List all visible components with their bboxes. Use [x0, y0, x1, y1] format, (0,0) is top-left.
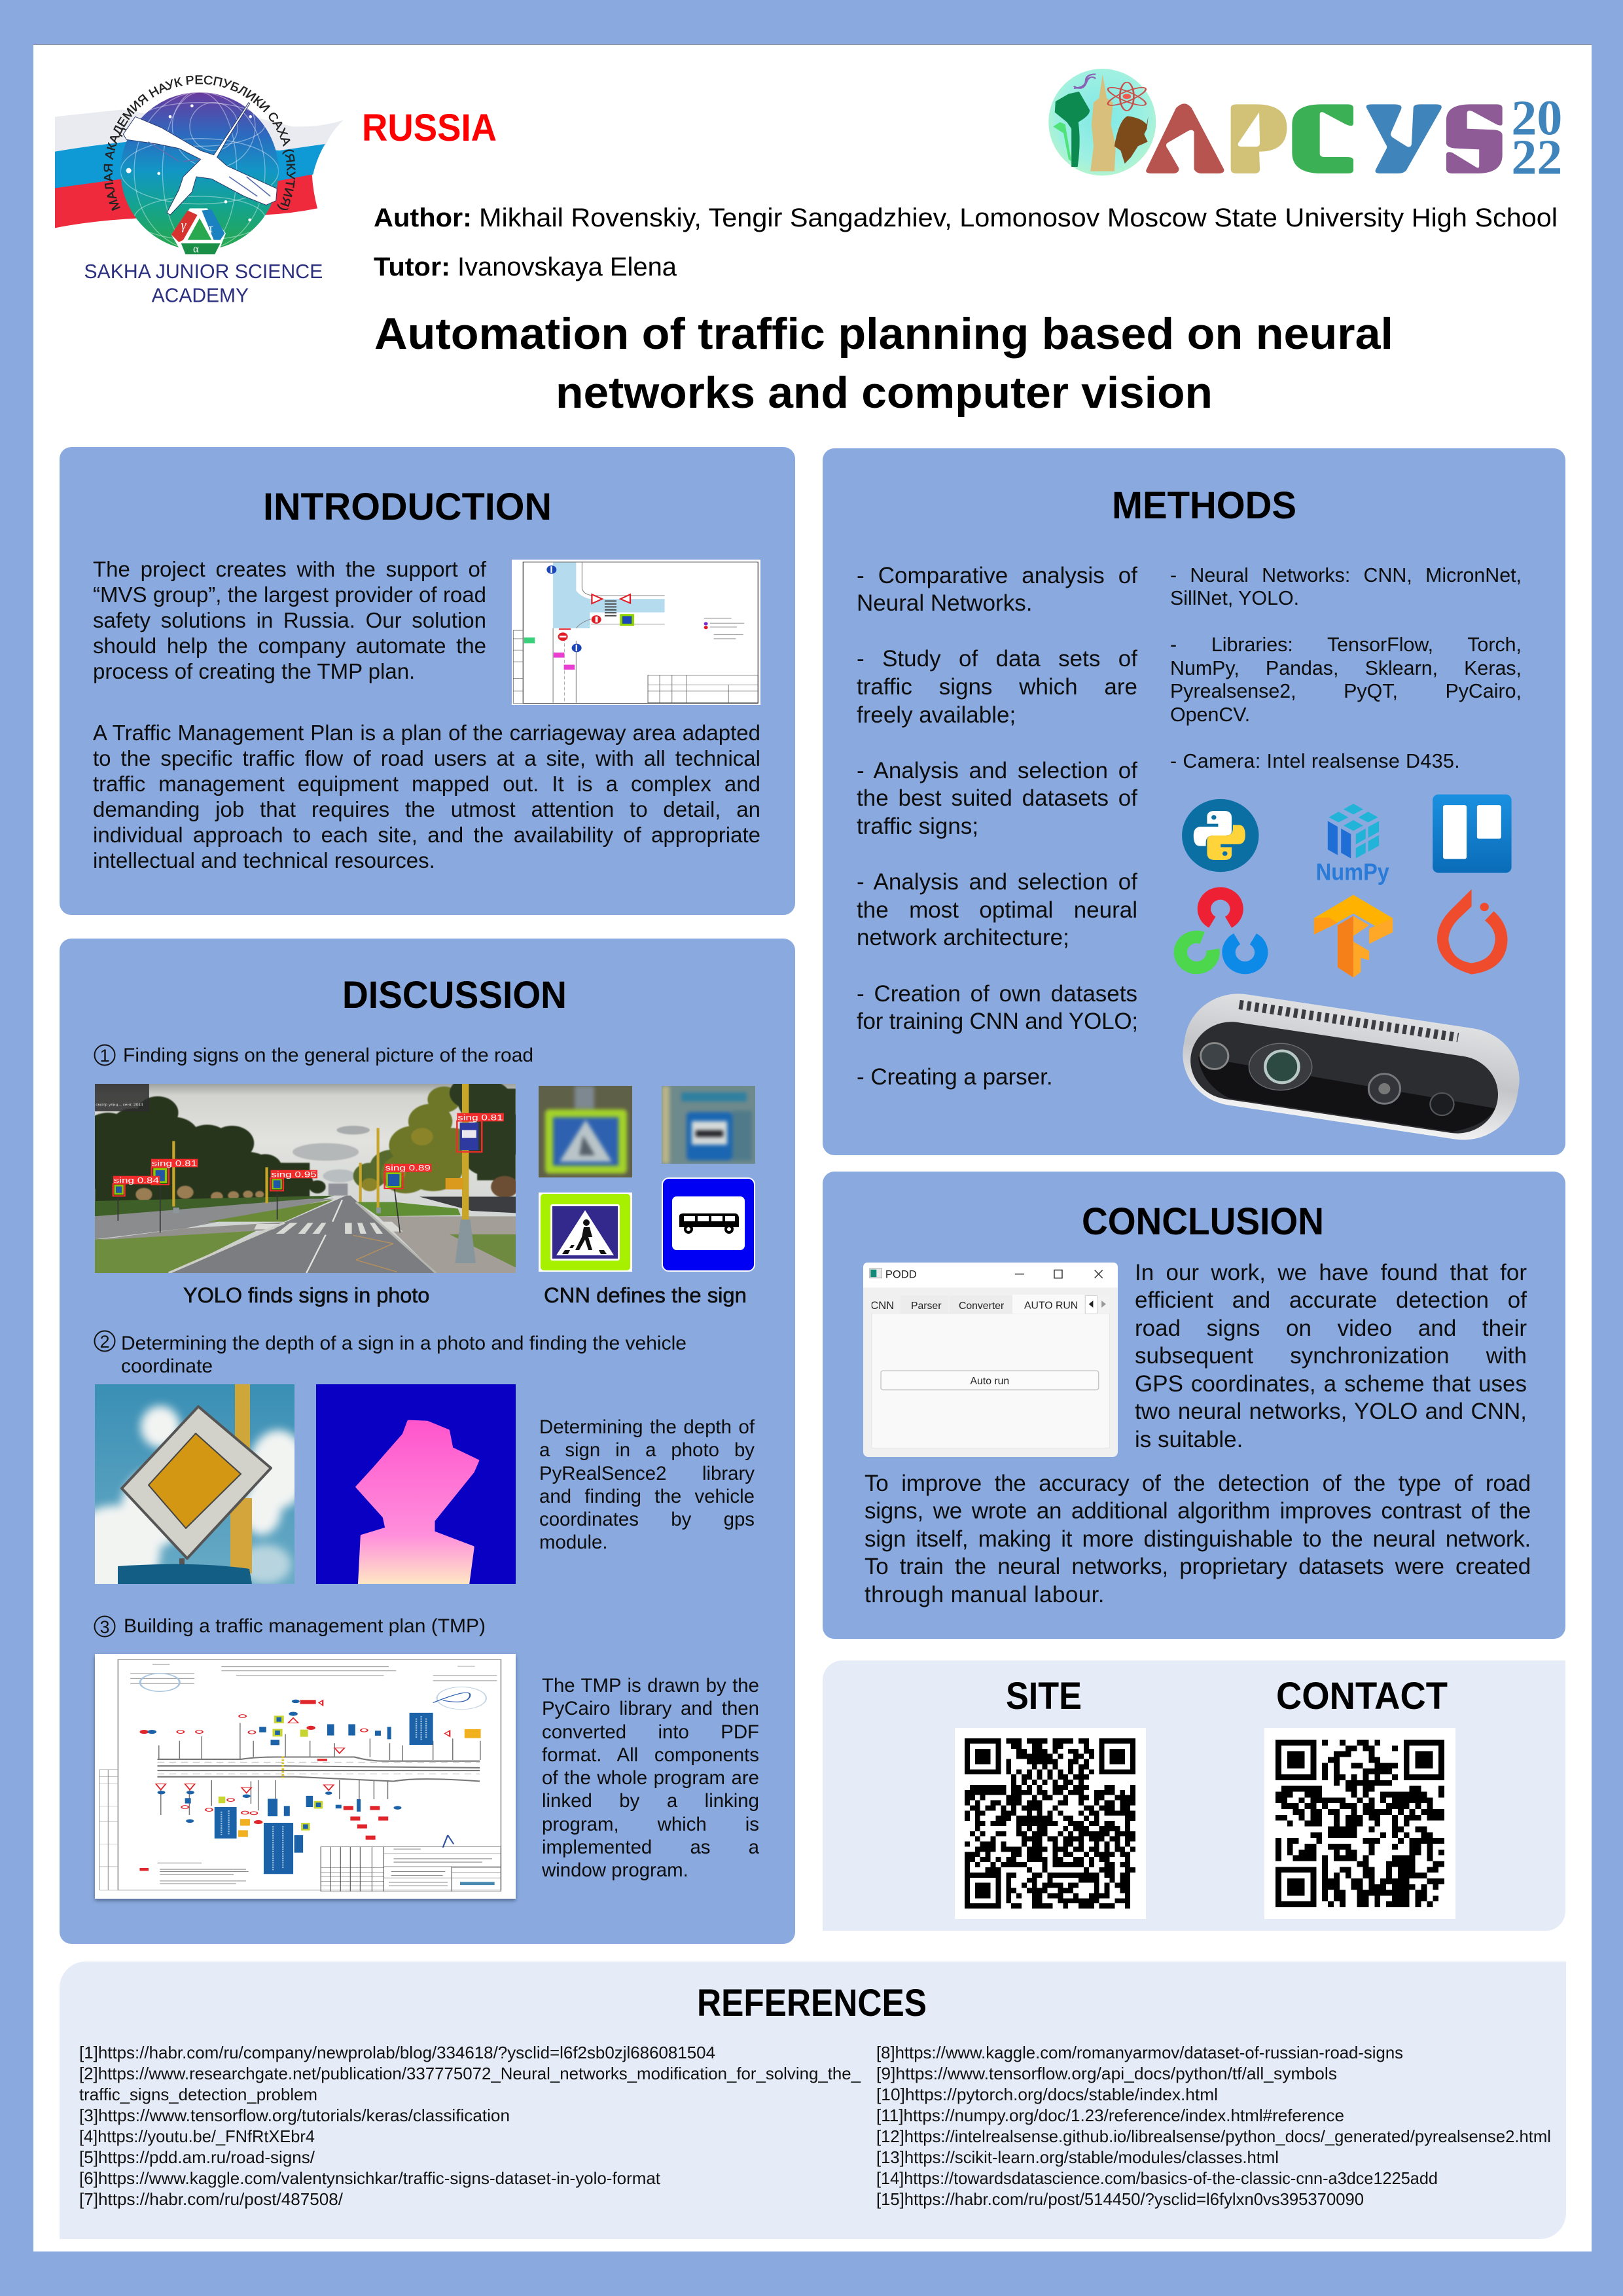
text: tools and libraries: - Neural Networks: CNN, MicronNet, — [1170, 564, 1522, 586]
reference list: right column: [15]https://habr.com/ru/post/514450/?ysclid=l6fylxn0vs395370090 — [876, 2189, 1364, 2209]
tutor line: Tutor: — [374, 253, 450, 281]
text: method steps: traffic signs which are — [857, 674, 1137, 700]
text: tools and libraries: - Libraries: TensorFlow, Torch, — [1170, 634, 1522, 656]
image: PODD application window — [863, 1263, 1118, 1457]
text: method steps: - Comparative analysis of — [857, 563, 1137, 588]
reference list: right column: [13]https://scikit-learn.org/stable/modules/classes.html — [876, 2147, 1279, 2167]
text: definition of TMP: traffic management equipment mapped out. It is a complex and — [93, 772, 760, 796]
text: depth explanation: a sign in a photo by — [539, 1439, 755, 1461]
reference list: right column — [876, 2040, 1557, 2217]
text: definition of TMP: intellectual and technical resources. — [93, 848, 435, 872]
text: method steps: - Creating a parser. — [857, 1064, 1053, 1090]
reference list: right column: [10]https://pytorch.org/docs/stable/index.html — [876, 2085, 1218, 2104]
marker: step 1 — [94, 1045, 115, 1066]
logo: Sakha Junior Science Academy: ACADEMY — [152, 285, 249, 307]
icon: PyTorch — [1437, 889, 1508, 974]
text: method steps: network architecture; — [857, 925, 1069, 950]
reference list: left column: [1]https://habr.com/ru/company/newprolab/blog/334618/?ysclid=l6f2sb0zjl686081504 — [79, 2043, 715, 2062]
panel: introduction — [60, 447, 795, 915]
text: findings — [1135, 1259, 1527, 1454]
text: definition of TMP: individual approach to each site, and the availability of appropriate — [93, 823, 760, 847]
text: TMP explanation: implemented as a — [542, 1837, 759, 1858]
text: TMP explanation: The TMP is drawn by the — [542, 1675, 759, 1696]
image: depth map — [316, 1384, 516, 1584]
marker: step 2 — [94, 1330, 115, 1352]
text: TMP explanation: program, which is — [542, 1814, 759, 1835]
image: PODD application window: Converter — [959, 1300, 1005, 1312]
title — [374, 309, 1393, 418]
reference list: right column: [14]https://towardsdatascience.com/basics-of-the-classic-cnn-a3dce1225add — [876, 2168, 1438, 2188]
text: depth explanation: and finding the vehicle — [539, 1486, 755, 1507]
step 3 heading: Building a traffic management plan (TMP) — [124, 1615, 486, 1637]
reference list: left column: [7]https://habr.com/ru/post/487508/ — [79, 2189, 344, 2209]
reference list: left column: [4]https://youtu.be/_FNfRtXEbr4 — [79, 2126, 315, 2146]
text: definition of TMP: to the specific traffic flow of road users at a site, with all technical — [93, 746, 760, 770]
icon: NumPy — [1316, 804, 1389, 885]
reference list: right column: [9]https://www.tensorflow.org/api_docs/python/tf/all_symbols — [876, 2064, 1337, 2083]
image: cropped crosswalk sign — [539, 1086, 632, 1177]
photo: YOLO detection on road: sing 0.84 — [114, 1176, 160, 1185]
panel: site and contact — [823, 1660, 1565, 1931]
logo: Sakha Junior Science Academy: SAKHA JUNIOR SCIENCE — [84, 260, 323, 283]
icon: NumPy: NumPy — [1316, 859, 1389, 885]
text: project summary — [93, 557, 487, 683]
image: reference bus stop sign — [662, 1177, 755, 1272]
text: method steps: for training CNN and YOLO; — [857, 1009, 1138, 1034]
text: method steps: the best suited datasets of — [857, 785, 1137, 811]
text: project summary: safety solutions in Russia. Our solution — [93, 608, 486, 632]
text: TMP explanation: PyCairo library and then — [542, 1698, 759, 1719]
text: findings: road signs on video and their — [1135, 1316, 1527, 1341]
reference list: left column: [3]https://www.tensorflow.org/tutorials/keras/classification — [79, 2106, 510, 2125]
text: tools and libraries: - Camera: Intel realsense D435. — [1170, 750, 1460, 772]
text: findings: In our work, we have found that for — [1135, 1260, 1527, 1285]
text: project summary: The project creates with the support of — [93, 557, 486, 581]
text: project summary: “MVS group”, the largest provider of road — [93, 583, 486, 607]
step 2 heading: coordinate — [121, 1355, 213, 1377]
text: algorithm and datasets: sign itself, making it more distinguishable to the neural network. — [865, 1526, 1531, 1552]
logo: Sakha Junior Science Academy: α — [193, 242, 199, 255]
QR code: contact — [1264, 1728, 1455, 1919]
text: method steps — [857, 563, 1138, 1090]
photo: YOLO detection on road: sing 0.81 — [457, 1113, 503, 1122]
text: findings: GPS coordinates, a scheme that uses — [1135, 1371, 1527, 1397]
text: depth explanation — [539, 1416, 755, 1553]
image: cropped bus stop sign — [662, 1086, 755, 1164]
author line: Author: — [374, 204, 472, 232]
icon: TensorFlow — [1314, 895, 1393, 977]
title: Automation of traffic planning based on neural — [374, 309, 1393, 359]
logo: APCYS 2022 — [1048, 69, 1562, 185]
text: method steps: freely available; — [857, 702, 1016, 728]
text: method steps: traffic signs; — [857, 814, 978, 839]
text: algorithm and datasets — [865, 1470, 1531, 1609]
image: traffic management plan drawing — [93, 1653, 518, 1903]
icon: OpenCV — [1178, 888, 1267, 973]
text: depth explanation: module. — [539, 1532, 608, 1553]
text: tools and libraries — [1170, 564, 1522, 773]
text: TMP explanation: format. All components — [542, 1744, 759, 1766]
text: algorithm and datasets: signs, we wrote an additional algorithm improves contrast of the — [865, 1498, 1531, 1524]
marker: step 3 — [94, 1615, 115, 1638]
caption: CNN: CNN defines the sign — [544, 1283, 747, 1307]
text: method steps: - Analysis and selection of — [857, 758, 1137, 783]
text: findings: efficient and accurate detection of — [1135, 1287, 1527, 1313]
step 1 heading: Finding signs on the general picture of the road — [123, 1045, 533, 1066]
reference list: left column: [6]https://www.kaggle.com/valentynsichkar/traffic-signs-dataset-in-yolo-format — [79, 2168, 661, 2188]
text: definition of TMP: demanding job that requires the utmost attention to detail, an — [93, 797, 760, 821]
text: algorithm and datasets: through manual labour. — [865, 1582, 1105, 1607]
logo: Sakha Junior Science Academy: τ — [208, 222, 213, 236]
text: tools and libraries: NumPy, Pandas, Sklearn, Keras, — [1170, 657, 1522, 679]
text: tools and libraries: OpenCV. — [1170, 704, 1250, 726]
photo: YOLO detection on road: смотр улиц – сент. 2014 — [96, 1103, 143, 1107]
image: reference crosswalk sign — [539, 1193, 632, 1272]
text: TMP explanation: of the whole program are — [542, 1767, 759, 1789]
text: findings: two neural networks, YOLO and CNN, — [1135, 1399, 1527, 1424]
text: definition of TMP: A Traffic Management Plan is a plan of the carriageway area adapted — [93, 721, 760, 745]
image: PODD application window: Auto run — [971, 1376, 1009, 1387]
text: TMP explanation: converted into PDF — [542, 1721, 759, 1743]
text: tools and libraries: Pyrealsense2, PyQT, PyCairo, — [1170, 680, 1522, 702]
author line: Mikhail Rovenskiy, Tengir Sangadzhiev, Lomonosov Moscow State University High School — [479, 204, 1558, 232]
image: traffic plan drawing — [512, 560, 760, 705]
photo: YOLO detection on road — [95, 1084, 516, 1273]
reference list: left column: traffic_signs_detection_problem — [79, 2085, 317, 2104]
text: method steps: - Analysis and selection of — [857, 869, 1137, 895]
reference list: right column: [8]https://www.kaggle.com/romanyarmov/dataset-of-russian-road-signs — [876, 2043, 1403, 2062]
text: depth explanation: PyRealSence2 library — [539, 1463, 755, 1484]
text: TMP explanation — [542, 1675, 759, 1881]
text: findings: subsequent synchronization with — [1135, 1343, 1527, 1369]
text: project summary: process of creating the TMP plan. — [93, 659, 415, 683]
logo: Sakha Junior Science Academy: МАЛАЯ АКАДЕМИЯ НАУК РЕСПУБЛИКИ САХА (ЯКУТИЯ) — [103, 75, 296, 211]
panel: methods — [823, 448, 1565, 1155]
step 2 heading: Determining the depth of a sign in a photo and finding the vehicle — [121, 1333, 687, 1354]
photo: priority road sign — [95, 1384, 294, 1584]
image: PODD application window: PODD — [885, 1268, 917, 1281]
image: PODD application window: CNN — [870, 1299, 894, 1312]
reference list: left column — [79, 2040, 865, 2217]
heading: introduction: INTRODUCTION — [263, 486, 552, 528]
logo: Sakha Junior Science Academy — [55, 75, 343, 307]
text: algorithm and datasets: To train the neural networks, proprietary datasets were created — [865, 1554, 1531, 1579]
text: TMP explanation: window program. — [542, 1859, 688, 1881]
text: algorithm and datasets: To improve the accuracy of the detection of the type of road — [865, 1471, 1531, 1496]
panel: conclusion — [823, 1172, 1565, 1639]
image: Intel RealSense D435 camera — [1175, 986, 1527, 1147]
step 2 heading — [121, 1333, 687, 1377]
QR code: site — [955, 1728, 1146, 1919]
image: PODD application window: AUTO RUN — [1024, 1300, 1078, 1311]
panel: references — [60, 1962, 1566, 2239]
panel: discussion — [60, 939, 795, 1944]
text: method steps: - Study of data sets of — [857, 646, 1137, 672]
photo: YOLO detection on road: sing 0.81 — [152, 1159, 197, 1168]
icon: Python — [1182, 798, 1258, 872]
text: findings: is suitable. — [1135, 1427, 1243, 1452]
marker: step 2: 2 — [99, 1332, 110, 1352]
text: depth explanation: Determining the depth of — [539, 1416, 755, 1438]
text: tools and libraries: SillNet, YOLO. — [1170, 587, 1299, 609]
photo: YOLO detection on road: sing 0.89 — [385, 1164, 431, 1172]
technology icons and camera — [1166, 787, 1525, 1142]
reference list: right column: [12]https://intelrealsense.github.io/librealsense/python_docs/_generated/pyrealsense2.html — [876, 2126, 1551, 2146]
text: method steps: Neural Networks. — [857, 590, 1032, 616]
title: networks and computer vision — [556, 368, 1213, 418]
caption: YOLO: YOLO finds signs in photo — [183, 1283, 429, 1307]
text: method steps: the most optimal neural — [857, 897, 1137, 923]
text: definition of TMP — [93, 721, 760, 872]
logo: Sakha Junior Science Academy: γ — [181, 219, 187, 233]
icon: Trello — [1433, 794, 1512, 872]
photo: YOLO detection on road: sing 0.95 — [271, 1170, 317, 1179]
marker: step 3: 3 — [99, 1617, 110, 1637]
image: PODD application window: Parser — [911, 1300, 942, 1312]
text: TMP explanation: linked by a linking — [542, 1790, 759, 1812]
tutor line: Ivanovskaya Elena — [457, 253, 677, 281]
text: method steps: - Creation of own datasets — [857, 980, 1137, 1007]
marker: step 1: 1 — [99, 1046, 110, 1066]
text: depth explanation: coordinates by gps — [539, 1509, 755, 1530]
reference list: right column: [11]https://numpy.org/doc/1.23/reference/index.html#reference — [876, 2106, 1344, 2125]
reference list: left column: [2]https://www.researchgate.net/publication/337775072_Neural_networks_modification_for_solving_the_ — [79, 2064, 861, 2083]
text: project summary: should help the company automate the — [93, 634, 486, 658]
reference list: left column: [5]https://pdd.am.ru/road-signs/ — [79, 2147, 315, 2167]
